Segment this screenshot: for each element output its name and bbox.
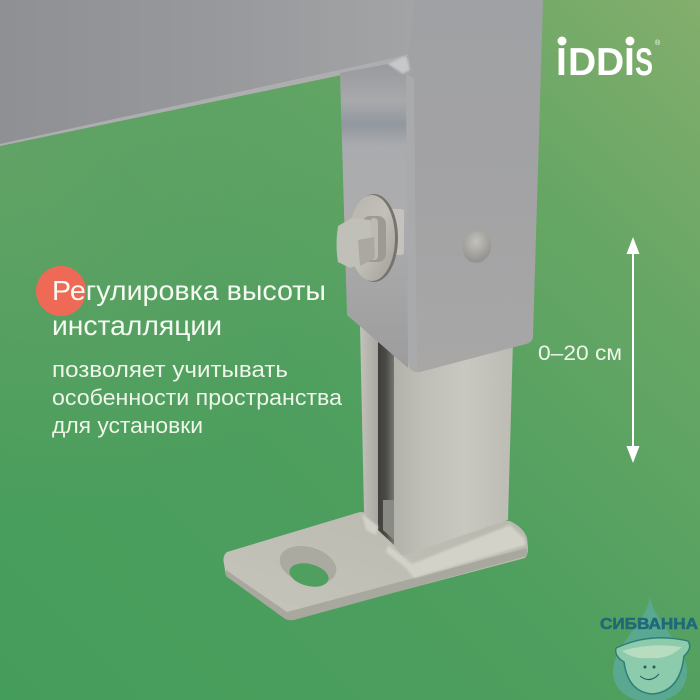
description text: особенности пространства xyxy=(52,385,343,410)
description text: позволяет учитывать xyxy=(52,357,288,382)
description text: для установки xyxy=(52,413,203,438)
description text xyxy=(52,357,343,438)
water drop xyxy=(613,597,687,700)
double-headed height arrow xyxy=(626,237,640,463)
Sibvanna watermark logo xyxy=(600,597,698,700)
heading with red accent circle xyxy=(36,266,326,341)
heading text: Регулировка высоты xyxy=(52,275,326,306)
IDDIS logo: IDDI xyxy=(556,41,635,84)
product photo: height-adjustable installation leg xyxy=(0,0,543,620)
dome rivet xyxy=(458,227,496,267)
heading with red accent circle: инсталляции xyxy=(52,310,222,341)
IDDIS logo xyxy=(556,36,661,84)
brand name: СИБВАННА xyxy=(600,616,698,633)
outer column front face xyxy=(388,0,543,372)
foot base plate xyxy=(223,512,528,620)
outer column side face xyxy=(340,64,408,368)
horizontal grey beam xyxy=(0,0,415,146)
red accent circle xyxy=(36,266,86,316)
bathtub mascot xyxy=(616,638,690,694)
registered mark: ® xyxy=(655,39,661,47)
foot upright tube xyxy=(360,325,526,578)
height range label: 0–20 см xyxy=(538,342,622,365)
bolt with washers xyxy=(336,194,404,282)
IDDIS logo: S xyxy=(635,41,653,84)
